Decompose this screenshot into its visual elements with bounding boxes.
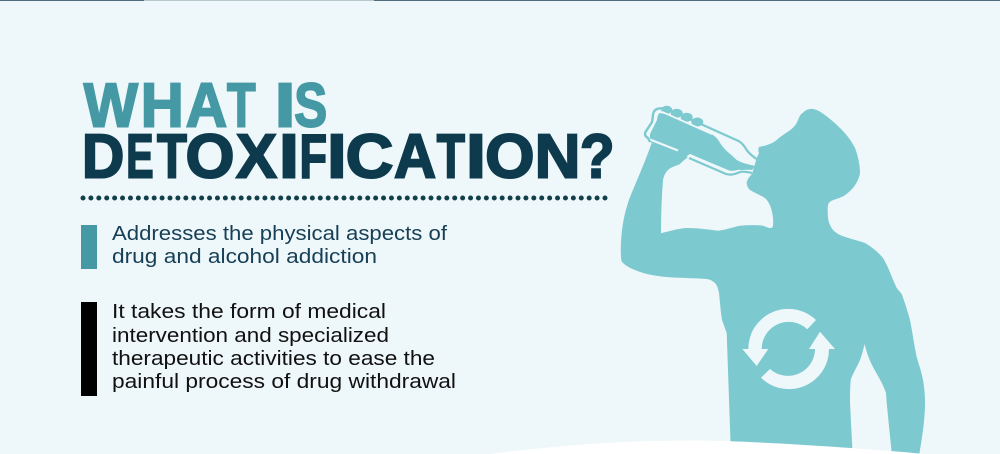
point 2 marker bar xyxy=(81,302,97,396)
heading line: WHAT IS: I xyxy=(275,70,296,140)
heading line: DETOXIFICATION?: ? xyxy=(580,121,615,191)
point 2 text: therapeutic activities to ease the xyxy=(112,348,435,370)
point 1 marker bar xyxy=(81,225,97,269)
point 1: physical aspects xyxy=(81,223,453,269)
heading line: DETOXIFICATION?: I xyxy=(279,121,299,191)
fingers gripping bottle xyxy=(661,106,703,126)
bottle highlight xyxy=(662,112,712,134)
point 2 text: It takes the form of medical xyxy=(112,301,386,323)
heading line: DETOXIFICATION?: F xyxy=(300,121,327,191)
icon: recycling arrows xyxy=(742,309,835,389)
heading line: WHAT IS: T xyxy=(227,70,256,140)
point 2 text: painful process of drug withdrawal xyxy=(112,371,456,393)
bottle base gap highlight xyxy=(650,140,678,150)
body silhouette xyxy=(621,109,925,454)
heading line: DETOXIFICATION?: I xyxy=(327,121,347,191)
bottle lower outline xyxy=(689,158,752,175)
heading line: DETOXIFICATION?: X xyxy=(236,121,277,191)
point 2: medical intervention xyxy=(81,301,456,396)
title xyxy=(82,70,615,191)
bottle base outline xyxy=(645,108,664,142)
bottle lower gap highlight xyxy=(690,155,740,172)
heading line: WHAT IS: H xyxy=(141,70,184,140)
upper arrow xyxy=(742,309,816,366)
heading line: DETOXIFICATION?: N xyxy=(535,121,580,191)
heading line: WHAT IS: S xyxy=(294,70,327,140)
bottle body fill xyxy=(650,113,755,171)
bottle top outline xyxy=(684,116,756,159)
dotted divider xyxy=(83,196,606,200)
point 1 text: Addresses the physical aspects of xyxy=(112,223,447,245)
heading line: DETOXIFICATION?: T xyxy=(157,121,187,191)
heading line: DETOXIFICATION?: O xyxy=(186,121,234,191)
heading line: WHAT IS: W xyxy=(84,70,138,140)
heading line: WHAT IS: A xyxy=(186,70,227,140)
heading line: DETOXIFICATION?: I xyxy=(466,121,486,191)
lower arrow xyxy=(761,332,835,389)
heading line: DETOXIFICATION?: T xyxy=(437,121,465,191)
bottle xyxy=(645,106,756,175)
heading line: DETOXIFICATION?: C xyxy=(346,121,394,191)
heading line: DETOXIFICATION?: E xyxy=(126,121,154,191)
illustration: person drinking from bottle xyxy=(621,106,925,454)
point 1 text: drug and alcohol addiction xyxy=(112,246,377,268)
heading line: DETOXIFICATION?: D xyxy=(82,121,124,191)
point 2 text: intervention and specialized xyxy=(112,325,389,347)
heading line: DETOXIFICATION?: A xyxy=(394,121,436,191)
heading line: DETOXIFICATION?: O xyxy=(485,121,535,191)
white ground curve xyxy=(490,440,925,454)
